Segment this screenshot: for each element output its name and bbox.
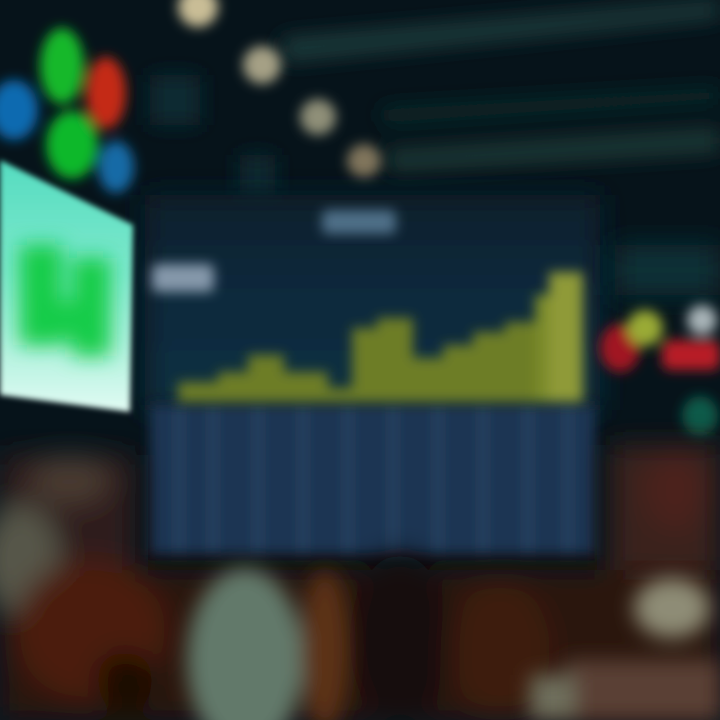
colored logo blobs — [0, 28, 134, 193]
right side teal glow — [615, 245, 720, 295]
chart label: top — [322, 210, 396, 234]
foreground: pale figure — [187, 568, 349, 720]
foreground: right figure — [530, 578, 720, 720]
ceiling beams — [150, 0, 720, 195]
ceiling lights — [178, 0, 381, 178]
chart label: left — [152, 264, 214, 292]
lower data table — [150, 405, 595, 555]
monitor screen — [0, 160, 133, 412]
chart backdrop panel — [145, 195, 600, 410]
bar chart — [178, 272, 583, 402]
monitor bars — [20, 245, 110, 356]
right side colored indicators — [600, 305, 720, 436]
left monitor — [0, 160, 133, 412]
foreground: audience — [0, 445, 720, 720]
